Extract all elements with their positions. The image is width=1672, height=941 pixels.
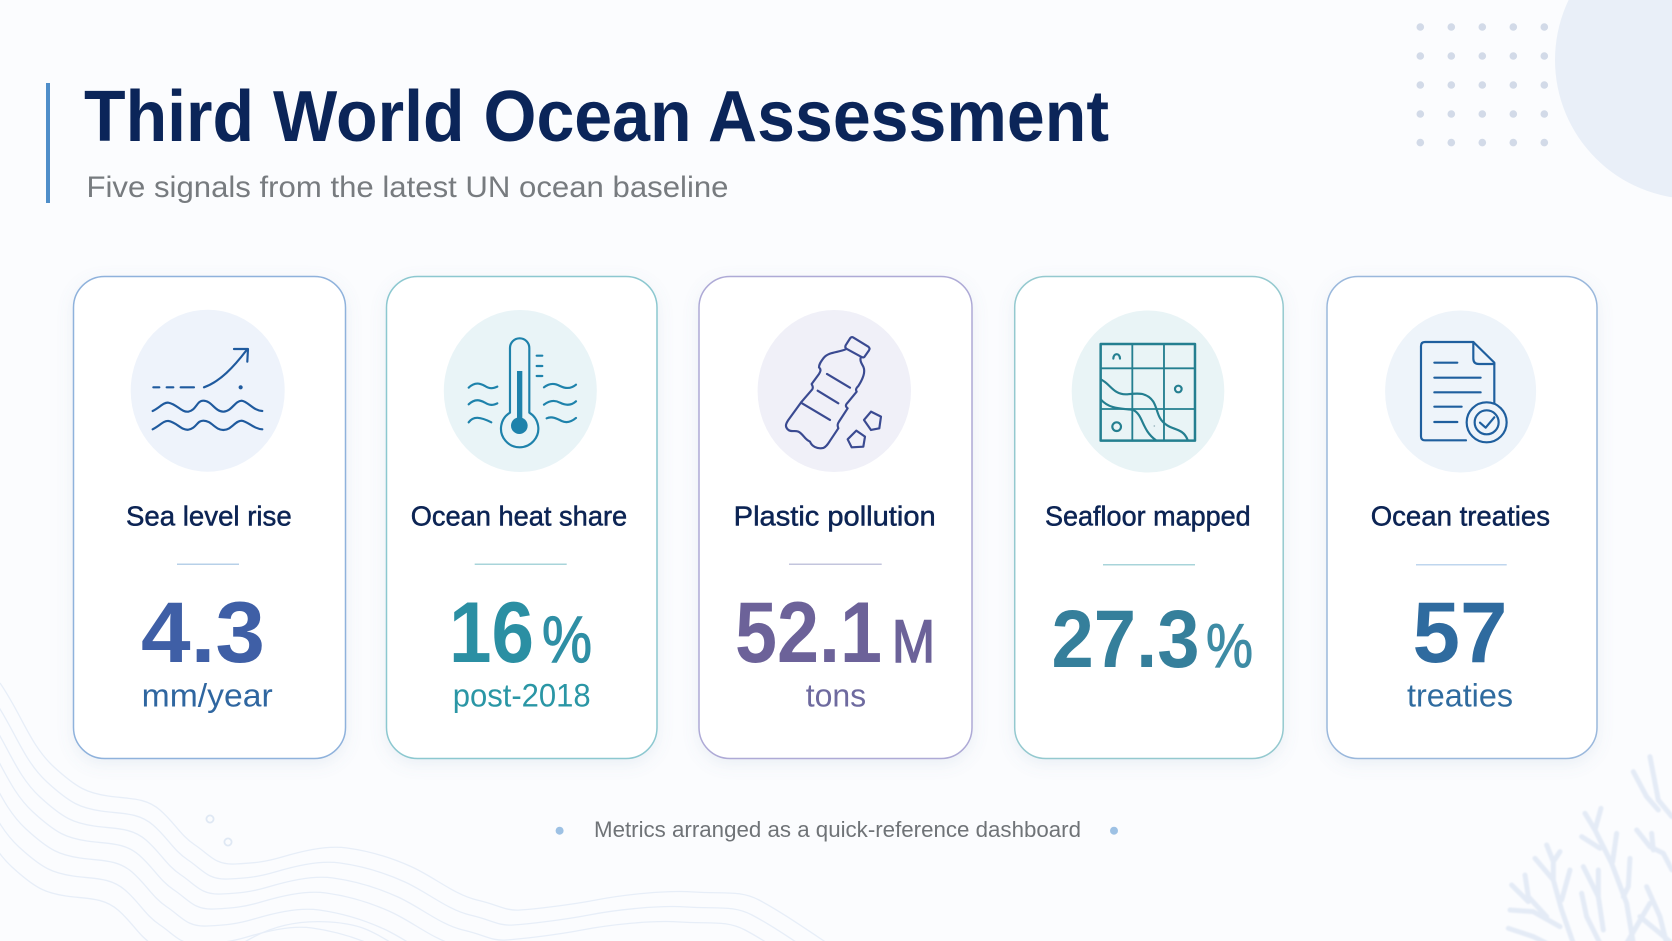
metric value: M <box>892 608 935 675</box>
decorative coral <box>1508 757 1672 941</box>
header accent bar <box>46 83 50 203</box>
metric unit: treaties <box>1407 678 1513 714</box>
metric value: % <box>1206 612 1253 681</box>
icon: plastic bottle with fragments <box>786 337 881 448</box>
card background <box>386 276 657 758</box>
metric label: Ocean treaties <box>1371 500 1550 532</box>
metric label: Plastic pollution <box>734 500 936 532</box>
panel: sea level rise <box>74 276 346 758</box>
icon circle <box>444 310 597 472</box>
metric value: 57 <box>1412 585 1508 681</box>
metric value <box>449 585 592 681</box>
panel: ocean treaties <box>1327 276 1597 758</box>
metric unit: tons <box>806 678 866 714</box>
icon: treaty document with seal <box>1421 342 1507 442</box>
metric unit: mm/year <box>142 678 273 714</box>
title: Third World Ocean Assessment <box>84 77 1109 157</box>
card background <box>74 276 346 758</box>
icon: seafloor grid map <box>1101 344 1195 441</box>
icon circle <box>1072 310 1224 472</box>
panel: ocean heat share <box>386 276 657 758</box>
card background <box>1015 276 1283 758</box>
metric unit: post-2018 <box>453 678 591 714</box>
metric value: % <box>542 602 592 676</box>
metric value: 27.3 <box>1052 594 1200 685</box>
panel: seafloor mapped <box>1015 276 1283 758</box>
icon: rising sea level <box>153 349 262 430</box>
metric value: 16 <box>449 585 534 681</box>
metric value: 52.1 <box>735 585 882 681</box>
icon: thermometer with waves <box>469 338 576 447</box>
subtitle: Five signals from the latest UN ocean baseline <box>86 171 728 204</box>
metric label: Ocean heat share <box>411 500 627 532</box>
footer note: Metrics arranged as a quick-reference dashboard <box>594 817 1081 842</box>
icon circle <box>131 310 285 472</box>
metric label: Seafloor mapped <box>1045 500 1251 532</box>
card background <box>699 276 972 758</box>
icon circle <box>1385 310 1536 472</box>
metric label: Sea level rise <box>126 500 292 532</box>
metric value: 4.3 <box>141 585 265 681</box>
icon circle <box>758 310 911 472</box>
panel: plastic pollution <box>699 276 972 758</box>
card background <box>1327 276 1597 758</box>
